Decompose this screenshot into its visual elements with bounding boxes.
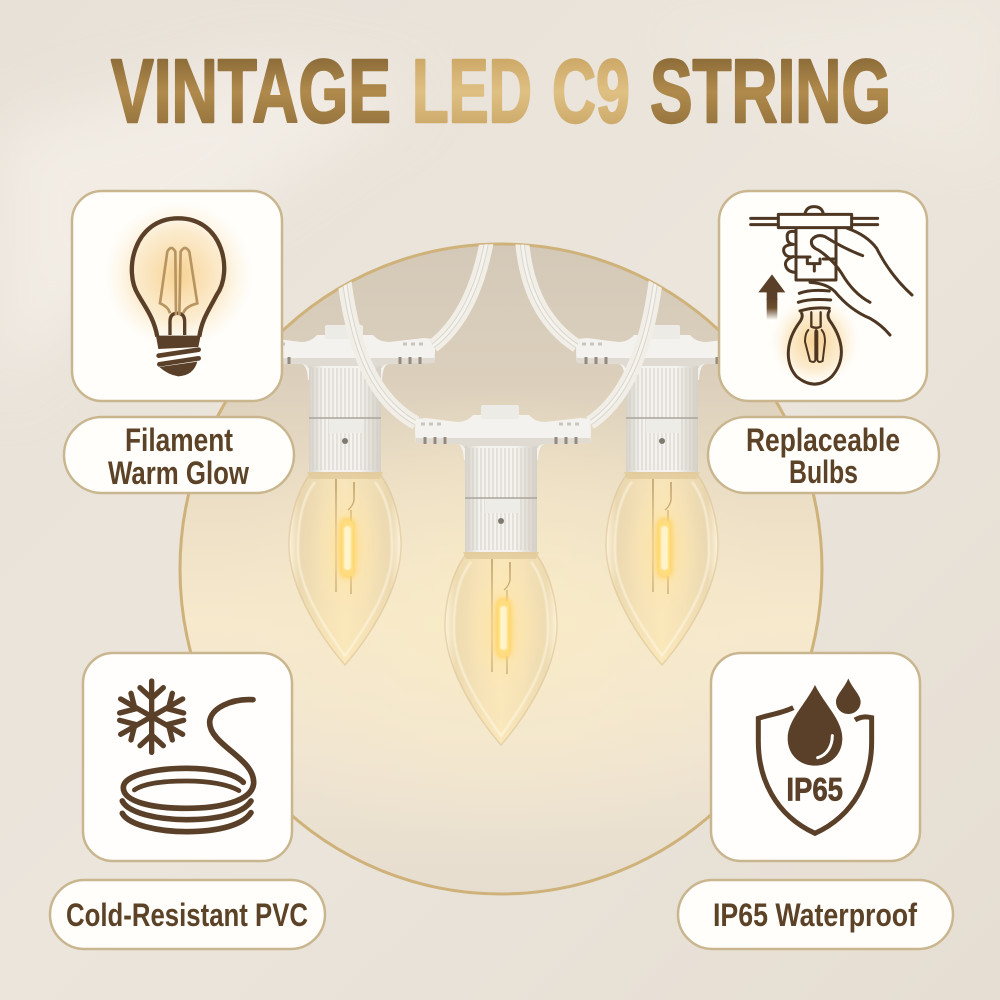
center bulb	[415, 405, 591, 745]
right bulb	[576, 325, 719, 666]
label: cold-resistant PVC	[50, 880, 325, 949]
central glowing circle	[180, 244, 822, 894]
label: filament warm glow: Warm Glow	[108, 455, 249, 491]
panel: filament icon	[72, 191, 282, 401]
label: filament warm glow	[64, 417, 294, 493]
label: cold-resistant PVC: Cold-Resistant PVC	[66, 897, 308, 933]
light string with three bulbs	[259, 240, 752, 745]
label: replaceable bulbs: Bulbs	[789, 454, 858, 490]
icon: filament bulb	[103, 200, 253, 376]
label: IP65 waterproof	[678, 880, 953, 949]
label: filament warm glow: Filament	[125, 422, 233, 458]
cables	[343, 240, 657, 423]
title: STRING	[650, 42, 891, 142]
icon: snowflake and coiled cable	[120, 681, 254, 832]
title: C9	[552, 42, 630, 142]
panel: replaceable bulbs icon	[719, 191, 927, 401]
label: IP65 waterproof: IP65 Waterproof	[713, 897, 917, 933]
left bulb	[283, 325, 435, 666]
icon: hand changing a bulb	[751, 207, 912, 387]
icon: shield with water drops: IP65	[786, 771, 843, 807]
title: LED	[412, 42, 532, 142]
icon: shield with water drops	[758, 678, 872, 833]
label: replaceable bulbs: Replaceable	[746, 422, 900, 458]
title: VINTAGE	[111, 42, 391, 142]
title	[111, 42, 891, 142]
panel: IP65 icon	[711, 653, 920, 861]
panel: cold-resistant icon	[83, 653, 292, 861]
label: replaceable bulbs	[708, 417, 939, 493]
